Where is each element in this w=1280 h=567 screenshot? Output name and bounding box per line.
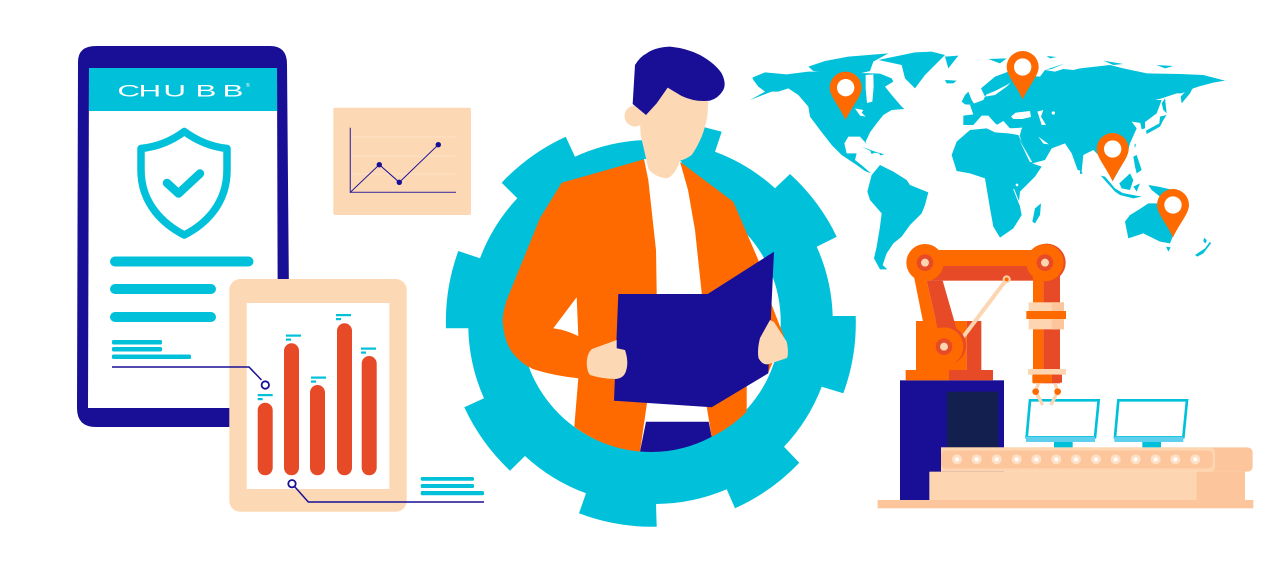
phone screen (88, 68, 278, 408)
ear (624, 106, 646, 126)
panel: tablet with bar chart (229, 279, 407, 512)
map: South America (867, 151, 928, 269)
floor and plinth (878, 472, 1253, 508)
icon: location pin Australia (1157, 189, 1189, 237)
panel: phone with insurance app (77, 46, 289, 427)
hair (633, 47, 725, 115)
machine cabinet (900, 380, 1004, 500)
robot gripper (1032, 383, 1061, 405)
panel: line chart card (333, 108, 471, 215)
callout: connector from phone to chart (112, 367, 269, 389)
right hand (758, 320, 788, 364)
app header: CHUBB (117, 82, 243, 100)
face and neck (640, 83, 709, 178)
panel: robot arm and conveyor (878, 244, 1253, 508)
left hand (587, 340, 627, 379)
bar chart (258, 314, 377, 475)
map: Eurasia, Africa (945, 56, 1225, 238)
jacket left (503, 159, 657, 452)
icon: shield with check (141, 132, 227, 235)
shirt (644, 159, 709, 422)
app header (89, 68, 277, 111)
map: East Asia, Oceania (1101, 61, 1211, 257)
text block: note lines (421, 477, 484, 495)
icon: location pin North America (830, 72, 862, 120)
icon: location pin Southeast Asia (1097, 133, 1129, 181)
icon: world map with location pins (750, 51, 1225, 269)
icon: location pin Europe (1007, 51, 1039, 99)
trousers (640, 422, 712, 452)
app header: ® (246, 82, 250, 89)
icon: gear ring (446, 125, 856, 527)
map pins (830, 51, 1189, 237)
jacket right (680, 162, 784, 437)
robot arm (906, 244, 1066, 383)
monitor on conveyor 1 (1026, 400, 1099, 447)
phone body (77, 46, 289, 427)
monitor on conveyor 2 (1114, 400, 1187, 447)
map: North America and Greenland (750, 52, 945, 173)
callout: connector from chart to notes (288, 480, 484, 502)
folder (614, 252, 774, 407)
conveyor belt (941, 447, 1253, 472)
panel: man reading a folder (503, 47, 788, 452)
text placeholder lines (110, 256, 254, 359)
